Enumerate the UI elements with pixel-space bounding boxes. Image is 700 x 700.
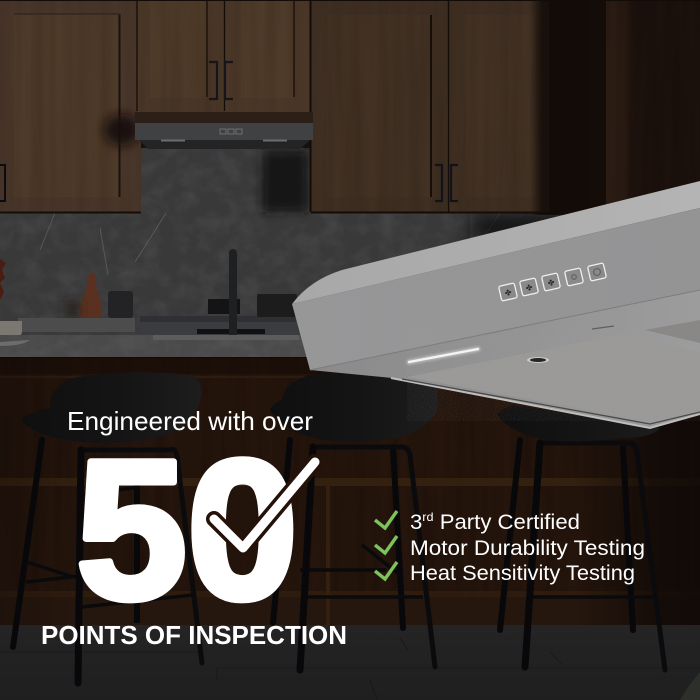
- tall side panel: [590, 0, 700, 215]
- control buttons: [499, 263, 606, 301]
- item: third party certified: rd: [422, 510, 434, 524]
- stool left: [13, 372, 202, 683]
- stool centre: [270, 373, 438, 670]
- item: motor durability: Motor Durability Testing: [410, 537, 645, 560]
- pot: [257, 294, 297, 317]
- sensor: [527, 357, 549, 363]
- faucet: [229, 253, 237, 338]
- floor: [0, 625, 700, 700]
- plant: [0, 259, 6, 300]
- jar: [108, 291, 133, 318]
- item: third party certified: 3: [410, 511, 422, 534]
- hood front fascia: [292, 208, 700, 370]
- backsplash: [0, 148, 620, 338]
- right wall cabinet doors: [310, 0, 610, 215]
- green check 3: [375, 562, 397, 579]
- green check 2: [375, 536, 397, 553]
- second filter: [645, 320, 700, 343]
- bar stools: [13, 372, 665, 683]
- white check over the zero: [214, 462, 315, 548]
- counter slab: [0, 335, 310, 359]
- cooktop: [140, 316, 298, 335]
- countertop items: [0, 253, 298, 340]
- left cabinet: [0, 1, 141, 212]
- stainless range hood: [292, 181, 700, 428]
- button: power: [588, 263, 606, 281]
- subheading: Engineered with over: [67, 406, 313, 436]
- shadow behind jars: [66, 302, 80, 317]
- faucet base: [208, 299, 240, 314]
- points of inspection heading: POINTS OF INSPECTION: [41, 620, 347, 650]
- checklist: [375, 510, 645, 585]
- stool right: [497, 406, 665, 670]
- item: heat sensitivity: Heat Sensitivity Testing: [410, 562, 635, 585]
- green check 1: [375, 511, 397, 528]
- upper cabinets: [0, 0, 700, 215]
- bottle: [80, 273, 102, 318]
- shelf tray: [18, 318, 135, 332]
- hood light strip: [409, 349, 478, 362]
- island front panelling: [0, 358, 700, 626]
- item: third party certified: Party Certified: [434, 511, 580, 534]
- button: fan low: ✤: [504, 288, 513, 298]
- button: fan medium: ✤: [525, 283, 534, 293]
- cup: [0, 321, 22, 340]
- main filter: [391, 334, 700, 428]
- small background range hood: [135, 112, 313, 149]
- button: light: [565, 268, 583, 286]
- button: fan high: ✤: [547, 278, 556, 288]
- hood top surface: [292, 181, 700, 304]
- hood lower lip: [310, 290, 700, 428]
- big number 50: 50: [76, 419, 298, 640]
- centre wall cabinet doors: [137, 0, 311, 112]
